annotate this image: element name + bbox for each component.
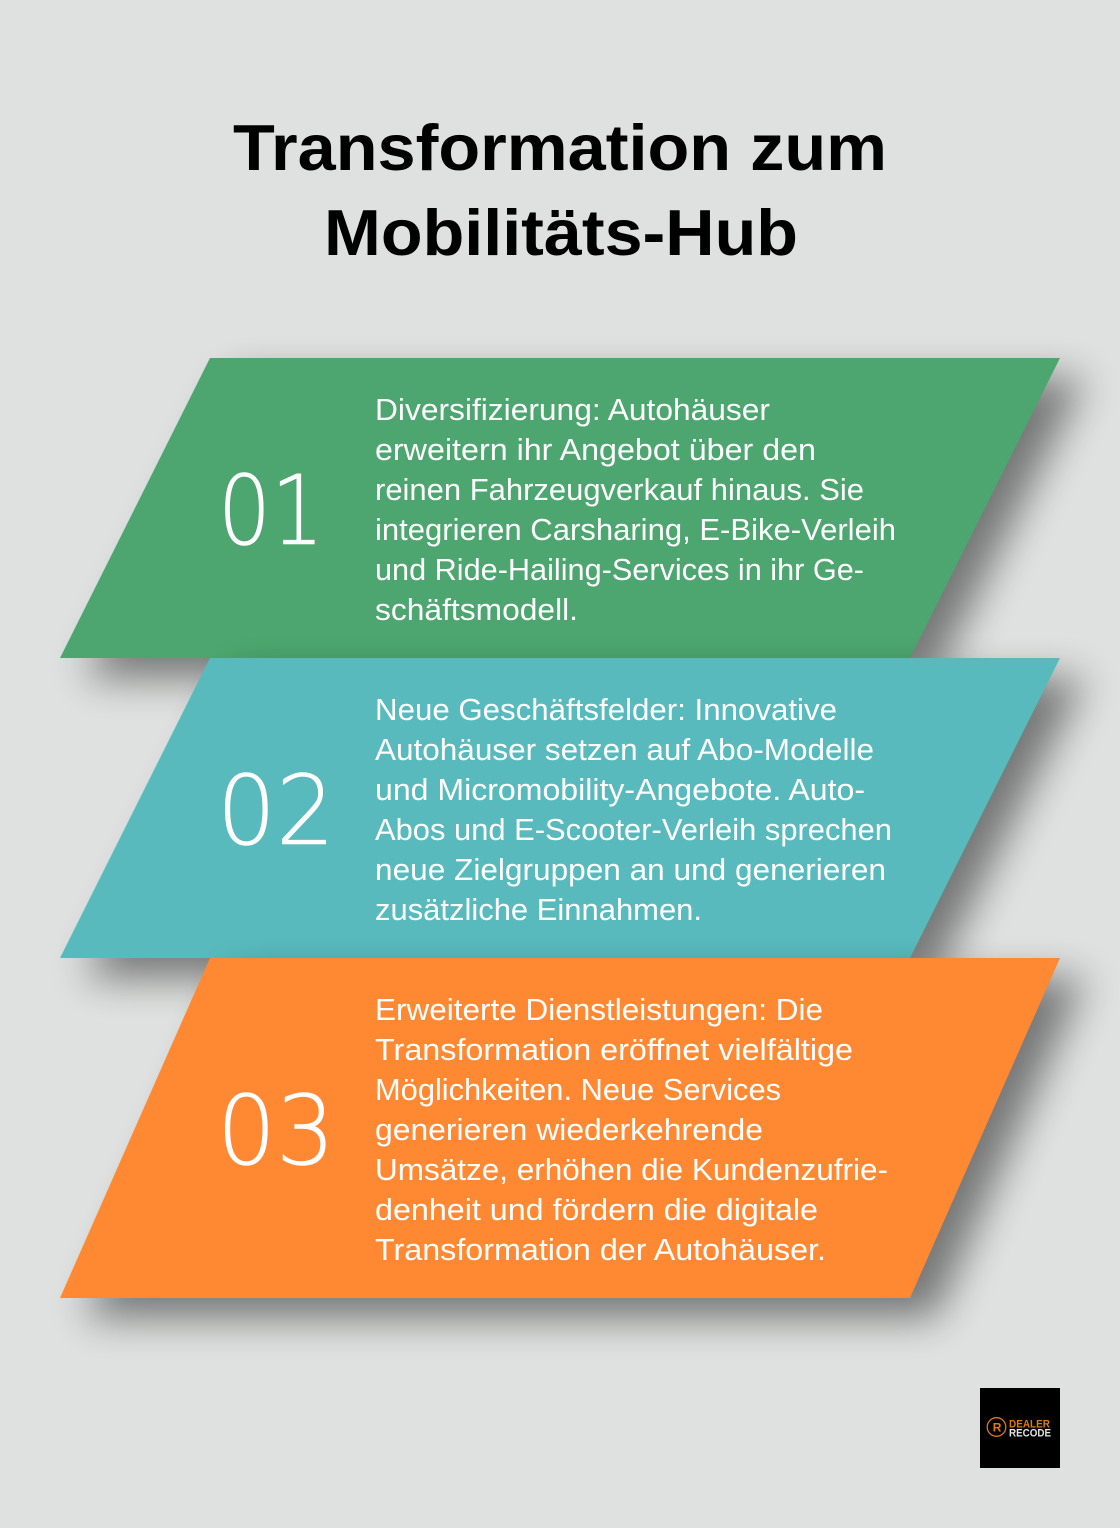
title [233, 111, 887, 269]
panel: step 3 [60, 958, 1085, 1318]
panel: step 2 [60, 658, 1085, 978]
text: step 2: neue Zielgruppen an und generieren [375, 852, 886, 887]
text: step 1: Diversifizierung: Autohäuser [375, 392, 770, 427]
text: step 3: Möglichkeiten. Neue Services [375, 1072, 781, 1107]
text: step 2: Abos und E-Scooter-Verleih sprechen [375, 812, 892, 847]
text: step 3: Transformation der Autohäuser. [375, 1232, 826, 1267]
logo: Dealer Recode: DEALER [1009, 1418, 1050, 1430]
text: step 3: denheit und fördern die digitale [375, 1192, 818, 1227]
text: step 2: Neue Geschäftsfelder: Innovative [375, 692, 837, 727]
panel: step 1 [60, 358, 1085, 678]
text: step 2: zusätzliche Einnahmen. [375, 892, 702, 927]
text: step 2: Autohäuser setzen auf Abo-Modelle [375, 732, 874, 767]
text: step 3: Erweiterte Dienstleistungen: Die [375, 992, 823, 1027]
title: Transformation zum [233, 111, 887, 184]
text: step 1: erweitern ihr Angebot über den [375, 432, 816, 467]
text: step 2 [375, 692, 892, 927]
text: step 1: integrieren Carsharing, E-Bike-Verleih [375, 512, 896, 547]
number 01: 01 [218, 455, 324, 567]
title: Mobilitäts-Hub [324, 196, 798, 269]
text: step 3: Transformation eröffnet vielfältige [375, 1032, 853, 1067]
text: step 2: und Micromobility-Angebote. Auto- [375, 772, 865, 807]
text: step 1: reinen Fahrzeugverkauf hinaus. Sie [375, 472, 864, 507]
text: step 3 [375, 992, 888, 1267]
text: step 1: schäftsmodell. [375, 592, 578, 627]
number 03: 03 [217, 1075, 335, 1187]
text: step 1: und Ride-Hailing-Services in ihr Ge- [375, 552, 864, 587]
icon: R ring: R [993, 1420, 1002, 1434]
text: step 3: Umsätze, erhöhen die Kundenzufrie- [375, 1152, 888, 1187]
text: step 3: generieren wiederkehrende [375, 1112, 763, 1147]
logo: Dealer Recode: RECODE [1009, 1428, 1051, 1440]
logo: Dealer Recode [980, 1388, 1060, 1468]
text: step 1 [375, 392, 896, 627]
number 02: 02 [217, 755, 335, 867]
